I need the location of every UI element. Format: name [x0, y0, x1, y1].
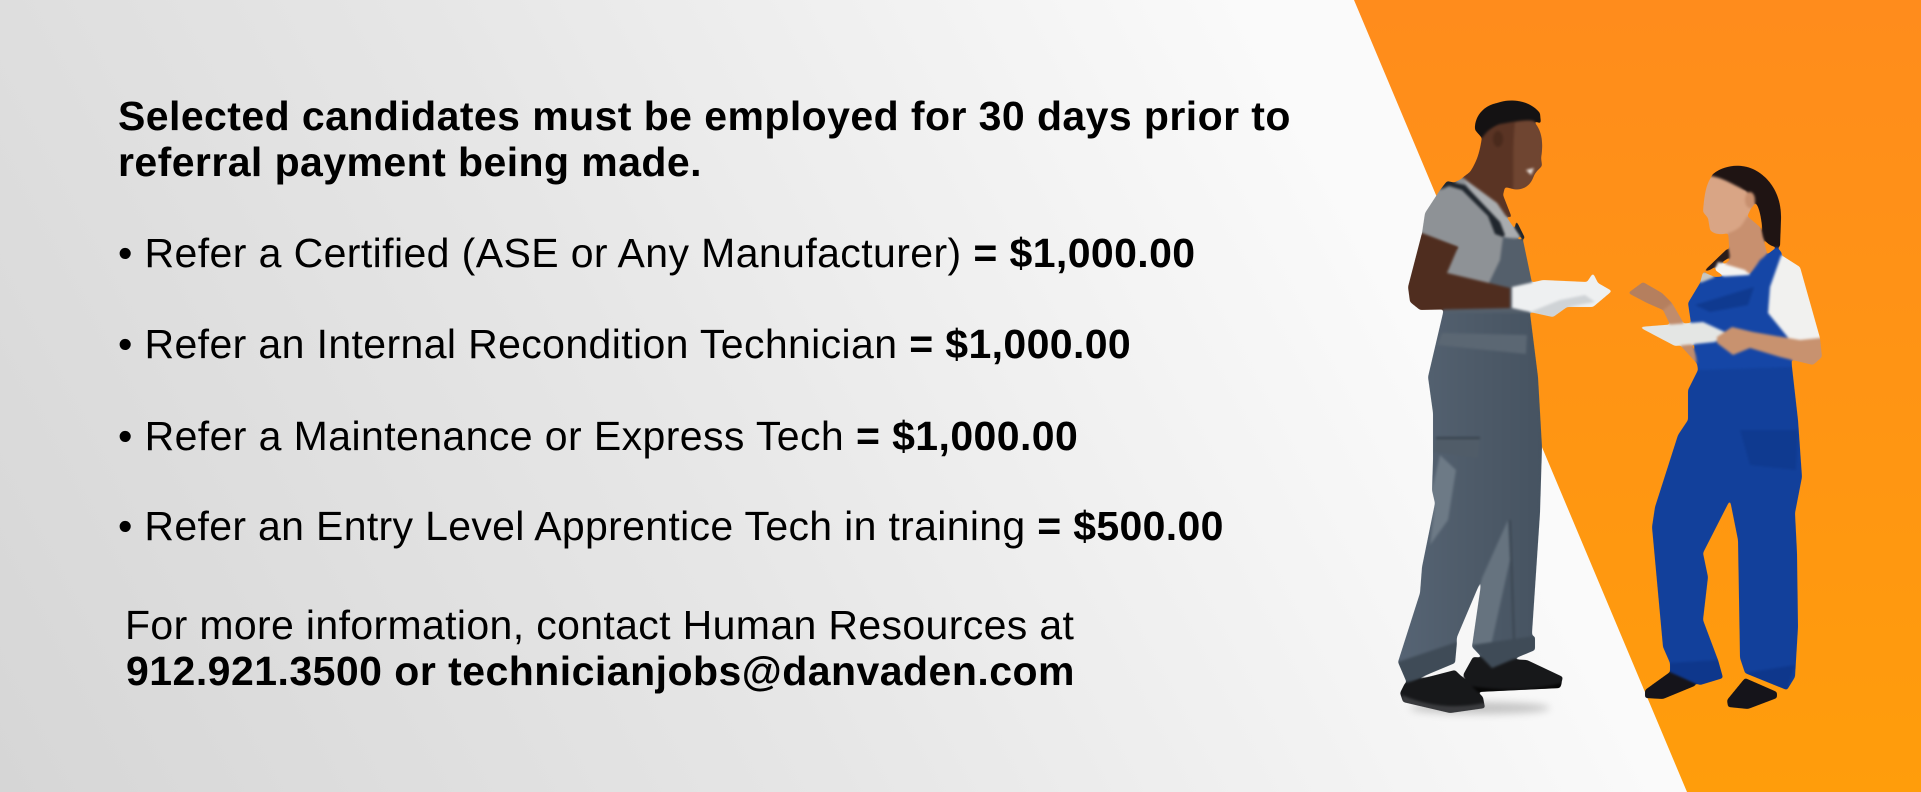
arm — [1408, 233, 1510, 310]
contact information — [125, 602, 1075, 694]
neck and face — [1717, 210, 1767, 273]
overall bib and straps — [1443, 237, 1532, 313]
heading: Selected candidates must be employed for 30 days prior to — [118, 93, 1291, 139]
trousers — [1652, 367, 1802, 690]
hand raised — [1628, 282, 1672, 310]
front shoe — [1400, 670, 1485, 713]
heading — [118, 93, 1291, 185]
smile — [1526, 168, 1534, 175]
orange diagonal panel — [1354, 0, 1921, 792]
bullet: internal recondition: • Refer an Internal Recondition Technician = $1,000.00 — [118, 321, 1131, 367]
heading: referral payment being made. — [118, 139, 702, 185]
back shoe — [1463, 657, 1563, 692]
ear — [1745, 192, 1755, 208]
tablet — [1639, 322, 1727, 346]
white shirt collar — [1715, 262, 1750, 277]
gray t-shirt — [1422, 178, 1520, 287]
hair at back — [1703, 248, 1730, 272]
bullet: maintenance or express: • Refer a Maintenance or Express Tech = $1,000.00 — [118, 413, 1078, 459]
illustration: female technician in blue overalls — [1628, 166, 1822, 709]
contact information: For more information, contact Human Resources at — [125, 602, 1075, 648]
contact information: 912.921.3500 or technicianjobs@danvaden.com — [126, 648, 1075, 694]
white sleeve — [1768, 253, 1820, 342]
bullet: certified: • Refer a Certified (ASE or Any Manufacturer) = $1,000.00 — [118, 230, 1196, 276]
ponytail hair — [1711, 166, 1781, 247]
ear — [1493, 131, 1503, 147]
waist band — [1437, 333, 1527, 354]
illustration: male technician in gray overalls — [1398, 100, 1612, 714]
white gloves — [1512, 273, 1612, 317]
referral bonus list — [118, 230, 1224, 549]
forearm behind tablet — [1663, 303, 1700, 367]
hair — [1475, 100, 1541, 138]
arm with hand on tablet — [1717, 327, 1822, 365]
neck and head — [1462, 119, 1542, 218]
blue bib — [1688, 247, 1792, 370]
shoes — [1645, 672, 1697, 699]
trousers — [1398, 313, 1542, 683]
bullet: entry level apprentice: • Refer an Entry Level Apprentice Tech in training = $500.00 — [118, 503, 1224, 549]
